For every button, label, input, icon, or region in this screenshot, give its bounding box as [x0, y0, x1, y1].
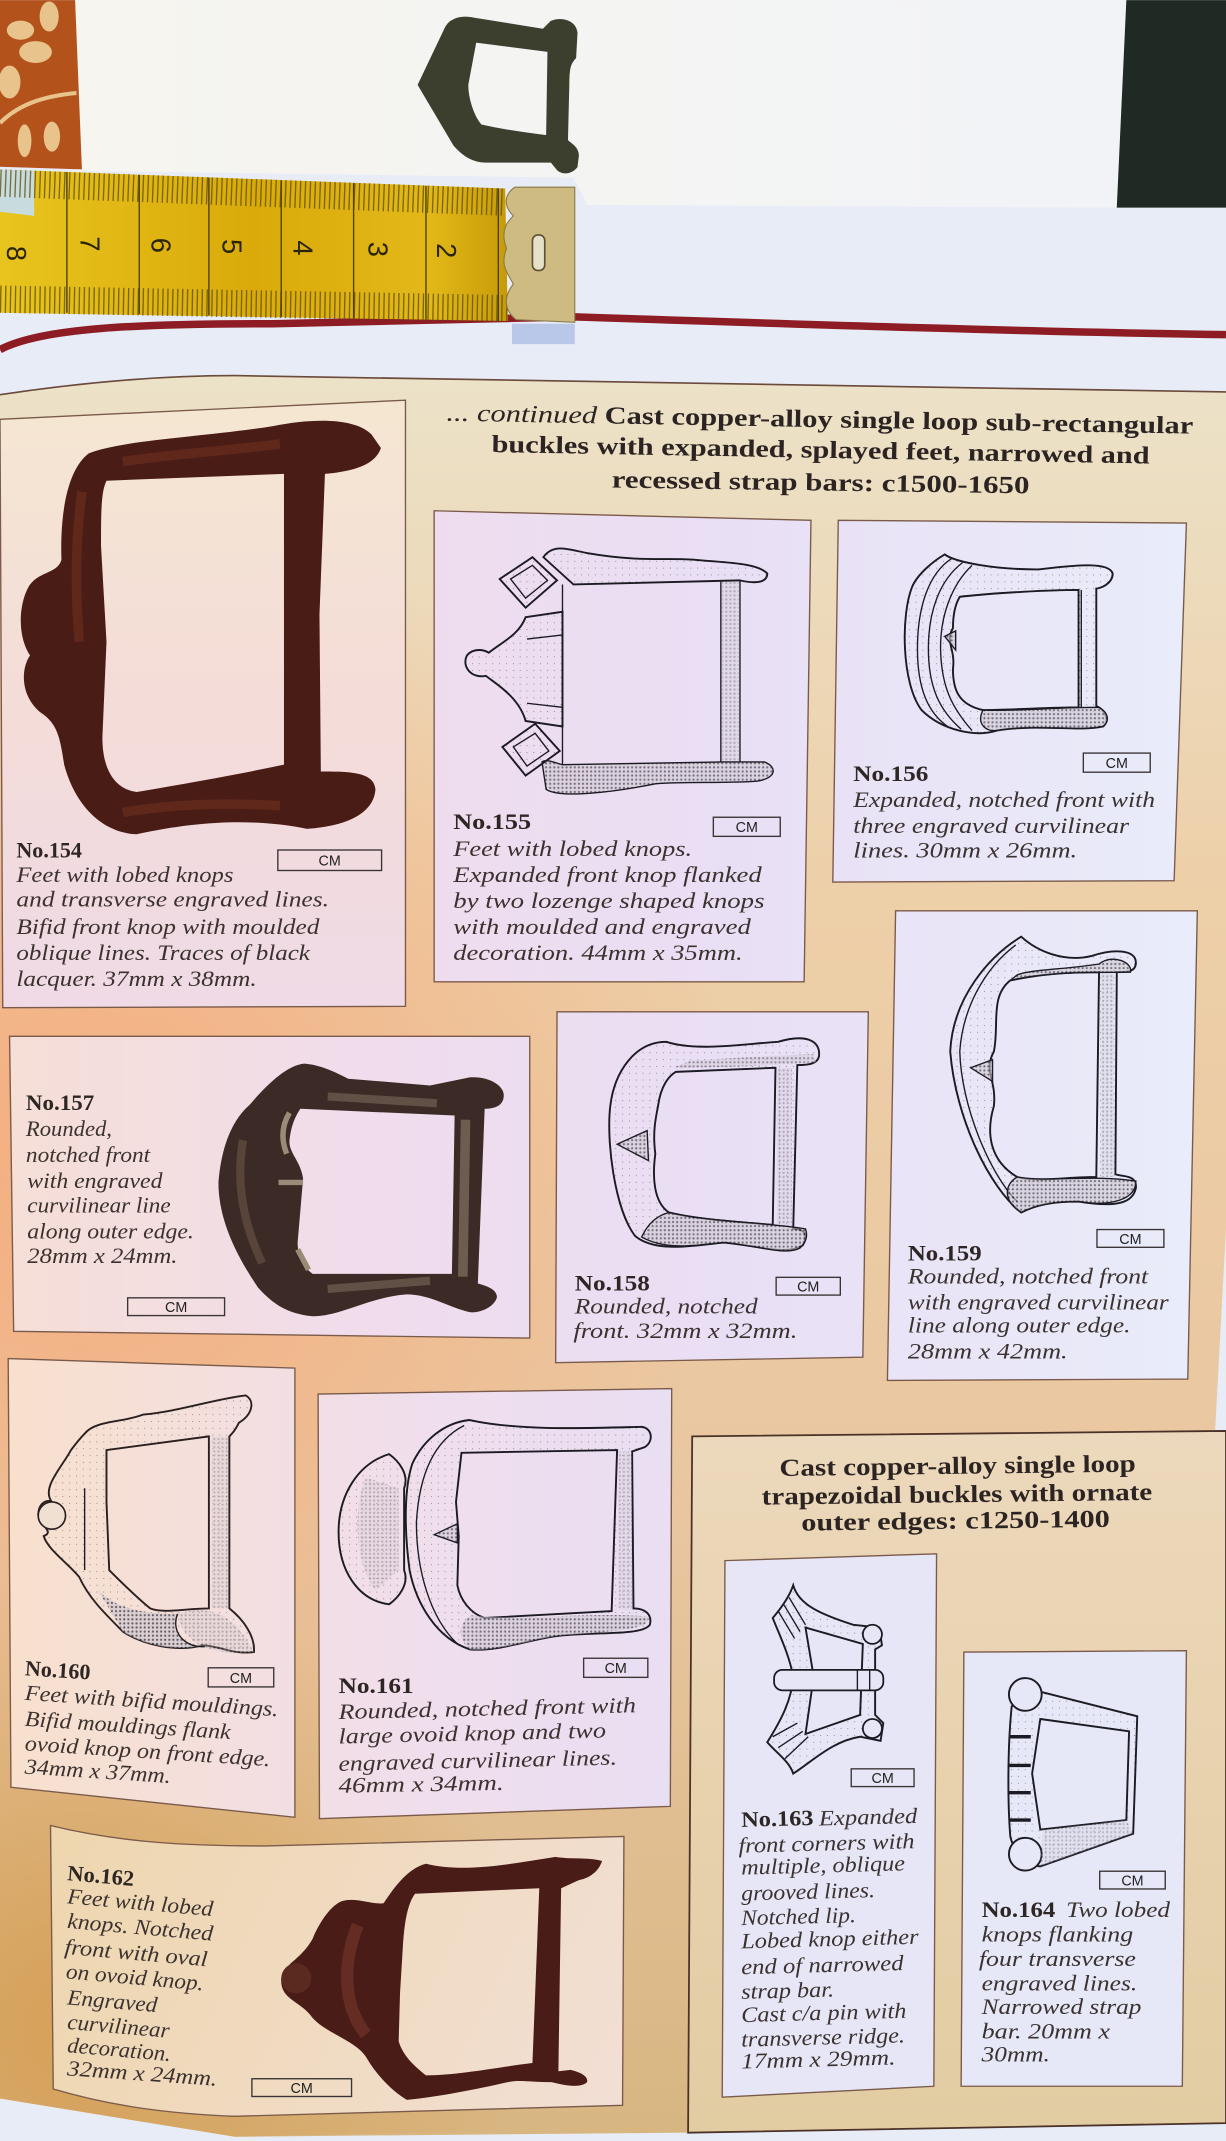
scale box 161: [584, 1658, 648, 1677]
caption 157: with engraved: [27, 1169, 163, 1193]
scale box 154: CM: [319, 854, 341, 870]
buckle drawing 155: [465, 548, 773, 794]
caption 155: [452, 810, 765, 965]
caption 156: [852, 762, 1155, 863]
scale box 159: CM: [1119, 1232, 1142, 1248]
caption 158: [573, 1271, 797, 1343]
measuring tape: 2: [431, 243, 462, 258]
caption 162: [64, 1861, 218, 2091]
caption 164: Narrowed strap: [980, 1995, 1141, 2019]
page lower-left shade: [0, 1502, 546, 2137]
caption 158: Rounded, notched: [574, 1295, 758, 1319]
scale box 156: [1083, 753, 1150, 772]
measuring tape: [0, 169, 575, 322]
caption 162: front with oval: [64, 1935, 209, 1971]
caption 162: Engraved: [65, 1985, 158, 2017]
panel: No.163: [722, 1554, 937, 2097]
heading: continued section: recessed strap bars: c1500-1650: [612, 467, 1030, 499]
caption 164: four transverse: [979, 1947, 1136, 1971]
patterned fabric: [0, 0, 82, 169]
buckle photo 157: [218, 1064, 504, 1316]
caption 161: 46mm x 34mm.: [338, 1771, 504, 1798]
panel: No.162: [51, 1825, 624, 2116]
caption 160: [23, 1656, 279, 1788]
dark background corner: [1117, 0, 1226, 208]
caption 160: ovoid knop on front edge.: [24, 1731, 271, 1771]
caption 160: No.160: [24, 1656, 91, 1685]
buckle drawing 163: [767, 1585, 883, 1774]
caption 160: Bifid mouldings flank: [24, 1707, 233, 1744]
heading: trapezoidal buckles: outer edges: c1250-1400: [801, 1506, 1110, 1537]
scale box 160: [208, 1668, 274, 1687]
buckle photo 154: [21, 421, 381, 834]
panel: No.155: [434, 511, 811, 982]
caption 157: 28mm x 24mm.: [27, 1244, 177, 1268]
panel: No.161: [318, 1389, 672, 1819]
heading: trapezoidal buckles: Cast copper-alloy single loop: [779, 1451, 1136, 1482]
scale box 154: [278, 850, 382, 870]
caption 154: lacquer. 37mm x 38mm.: [16, 967, 257, 991]
caption 164: bar. 20mm x: [982, 2019, 1110, 2043]
scale box 164: CM: [1121, 1874, 1144, 1890]
caption 163: [738, 1804, 919, 2074]
caption 159: 28mm x 42mm.: [908, 1340, 1068, 1364]
caption 157: along outer edge.: [27, 1219, 194, 1243]
caption 158: No.158: [575, 1271, 650, 1295]
caption 155: Expanded front knop flanked: [452, 863, 762, 887]
caption 164: No.164: [982, 1898, 1055, 1922]
scale box 158: [776, 1277, 840, 1296]
caption 156: Expanded, notched front with: [852, 788, 1155, 812]
caption 158: front. 32mm x 32mm.: [573, 1319, 797, 1343]
buckle drawing 160: [38, 1395, 254, 1653]
scale box 155: [713, 817, 780, 836]
caption 161: No.161: [339, 1674, 414, 1698]
scale box 160: CM: [230, 1671, 252, 1687]
scale box 162: CM: [291, 2081, 313, 2097]
buckle drawing 164: [1008, 1678, 1137, 1871]
caption 162: No.162: [66, 1861, 135, 1891]
measuring tape: 3: [363, 242, 394, 257]
caption 157: No.157: [26, 1091, 94, 1115]
scale box 161: CM: [605, 1661, 627, 1677]
caption 155: by two lozenge shaped knops: [453, 889, 765, 913]
caption 163: front corners with: [738, 1829, 915, 1858]
caption 159: with engraved curvilinear: [908, 1290, 1169, 1314]
page top border: [0, 376, 1226, 395]
caption 157: Rounded,: [25, 1117, 112, 1141]
panel: No.159: [887, 911, 1197, 1380]
measuring tape: 6: [146, 238, 177, 253]
caption 155: Feet with lobed knops.: [452, 837, 692, 861]
caption 163: Notched lip.: [740, 1903, 856, 1930]
caption 154: Feet with lobed knops: [15, 863, 233, 887]
caption 161: engraved curvilinear lines.: [338, 1746, 617, 1776]
caption 164: knops flanking: [982, 1923, 1133, 1947]
heading: continued section: buckles with expanded, splayed feet, narrowed and: [491, 431, 1150, 470]
caption 159: [907, 1241, 1169, 1364]
caption 162: knops. Notched: [66, 1909, 214, 1946]
red rule: [0, 317, 1226, 350]
caption 163: No.163: [741, 1806, 814, 1832]
shadow under tape tab: [512, 324, 575, 344]
caption 163: transverse ridge.: [741, 2023, 905, 2052]
caption 164: 30mm.: [980, 2043, 1050, 2067]
heading: trapezoidal buckles: trapezoidal buckles with ornate: [762, 1479, 1152, 1511]
scale box 163: [851, 1769, 914, 1787]
caption 160: 34mm x 37mm.: [23, 1755, 172, 1788]
caption 162: decoration.: [66, 2033, 172, 2066]
panel: No.156: [833, 520, 1186, 882]
caption 156: three engraved curvilinear: [853, 814, 1130, 838]
caption 156: lines. 30mm x 26mm.: [853, 839, 1077, 863]
page peach light: [0, 376, 710, 2137]
caption 162: curvilinear: [66, 2010, 171, 2043]
buckle drawing 156: [905, 554, 1113, 733]
caption 161: large ovoid knop and two: [338, 1719, 606, 1749]
buckle drawing 158: [609, 1038, 819, 1251]
caption 156: No.156: [853, 762, 928, 786]
caption 157: [25, 1091, 194, 1268]
scale box 164: [1100, 1871, 1165, 1890]
panel: No.160: [8, 1359, 295, 1817]
panel: No.154: [0, 400, 405, 1008]
caption 163: end of narrowed: [741, 1951, 904, 1979]
scale box 162: [252, 2079, 352, 2097]
caption 159: Rounded, notched front: [907, 1264, 1149, 1288]
caption 154: Bifid front knop with moulded: [16, 915, 320, 939]
scale box 157: CM: [165, 1300, 187, 1316]
scale box 155: CM: [736, 820, 758, 836]
buckle photo 162: [281, 1857, 602, 2100]
caption 161: [337, 1674, 636, 1798]
panel: No.158: [556, 1012, 868, 1363]
measuring tape: 5: [217, 239, 248, 254]
caption 157: notched front: [26, 1143, 151, 1167]
panel: No.164: [961, 1651, 1186, 2086]
buckle drawing 159: [950, 937, 1136, 1212]
measuring tape: 8: [1, 246, 32, 261]
small photographed trapezoidal buckle: [419, 18, 578, 172]
caption 164: [979, 1898, 1170, 2067]
caption 162: Feet with lobed: [65, 1884, 214, 1921]
measuring tape: 7: [75, 236, 106, 252]
caption 161: Rounded, notched front with: [337, 1693, 636, 1724]
caption 164: engraved lines.: [982, 1972, 1137, 1996]
caption 160: Feet with bifid mouldings.: [23, 1681, 279, 1721]
caption 163: 17mm x 29mm.: [741, 2045, 896, 2074]
caption 155: No.155: [453, 810, 531, 834]
caption 154: No.154: [16, 839, 82, 863]
measuring tape: 4: [288, 240, 319, 256]
upper white sheet: [75, 0, 1128, 208]
heading: continued section: [446, 400, 1194, 499]
panel: No.157: [10, 1036, 530, 1338]
caption 159: No.159: [908, 1241, 982, 1265]
caption 155: decoration. 44mm x 35mm.: [453, 941, 743, 965]
caption 155: with moulded and engraved: [453, 915, 751, 939]
caption 163: Lobed knop either: [740, 1925, 919, 1953]
caption 154: [15, 839, 329, 991]
caption 154: and transverse engraved lines.: [16, 888, 329, 912]
caption 157: curvilinear line: [27, 1193, 171, 1217]
caption 163: strap bar.: [741, 1977, 834, 2004]
caption 162: on ovoid knop.: [65, 1959, 205, 1995]
heading: trapezoidal buckles: [762, 1451, 1152, 1537]
heading: continued section: ... continued Cast copper-alloy single loop sub-rectangular: [446, 400, 1194, 440]
scale box 156: CM: [1106, 756, 1128, 772]
caption 163: grooved lines.: [741, 1878, 875, 1906]
caption 163: multiple, oblique: [741, 1851, 906, 1880]
caption 159: line along outer edge.: [908, 1314, 1130, 1338]
caption 154: oblique lines. Traces of black: [16, 941, 311, 965]
section panel: trapezoidal buckles: [688, 1431, 1226, 2133]
caption 162: 32mm x 24mm.: [65, 2056, 218, 2091]
buckle drawing 161: [339, 1420, 651, 1650]
caption 164: Two lobed: [1066, 1898, 1170, 1922]
scale box 157: [128, 1298, 225, 1316]
caption 163: Cast c/a pin with: [741, 1999, 907, 2027]
scale box 158: CM: [797, 1280, 819, 1296]
scale box 159: [1097, 1230, 1164, 1248]
scale box 163: CM: [871, 1771, 894, 1787]
caption 163: Expanded: [818, 1804, 918, 1831]
